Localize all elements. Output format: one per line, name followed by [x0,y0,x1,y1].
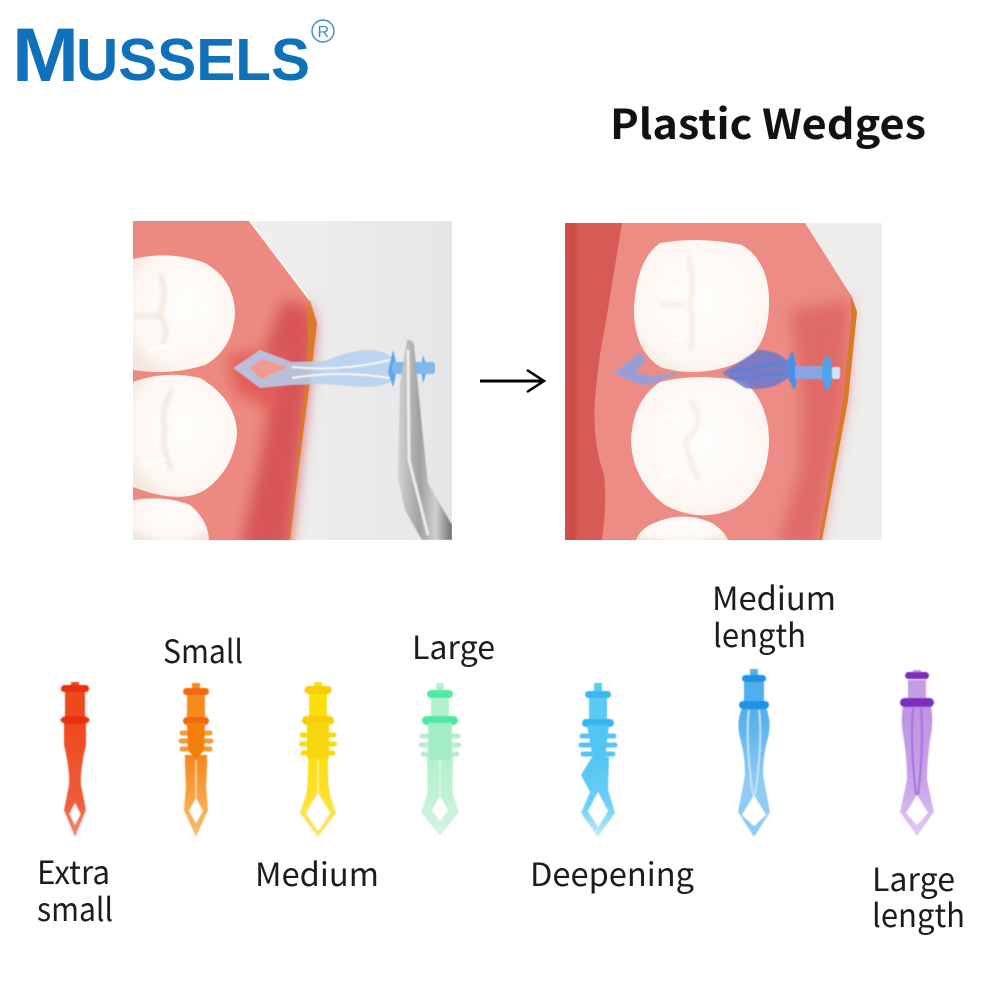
hole [70,803,80,825]
ribs [421,736,459,754]
arrow [480,370,544,392]
ribs [181,733,211,749]
photo background [252,221,452,540]
label: medium length [712,574,836,657]
photo: wedge held with tweezers before insertion [133,221,452,550]
ribs [581,736,615,754]
photo background [805,223,882,540]
tooth highlights [145,344,170,466]
center slit [195,760,197,798]
label: extra small: small [37,885,113,931]
flanges [422,690,458,725]
wedge: extra small, red [60,682,90,837]
lower tooth [636,517,728,540]
body [900,706,934,836]
body [300,725,336,837]
label: large: Large [412,623,495,669]
flanges [582,691,614,727]
tweezers [398,340,452,540]
logo: Mussels [12,13,334,98]
core [307,722,329,758]
wedge end [832,367,840,379]
core [429,723,451,760]
label: large length: length [872,891,965,937]
body [581,757,615,837]
hole [742,795,766,826]
logo initial: M [12,13,79,98]
ribs [302,735,334,753]
label: medium length: length [713,611,806,657]
flanges [900,672,934,707]
wedge highlight [730,362,786,378]
label: extra small: Extra [37,848,110,894]
orange gum edge [288,301,317,540]
stem [65,682,85,720]
wedge: large, green [421,683,459,836]
flanges [739,675,769,709]
body [421,725,459,836]
tooth fissures [133,275,172,470]
wedge: deepening, cyan [581,683,615,837]
body [184,755,208,837]
stem [744,669,764,705]
dark gum band [240,300,315,550]
middle tooth [631,377,769,515]
hole [189,798,203,823]
upper tooth [634,240,769,372]
wedge stem [392,362,435,374]
wedge: small, orange [181,683,211,837]
label: medium length: Medium [712,574,836,620]
label: large length [872,855,965,937]
wedge flange [787,350,797,390]
inner lines [912,708,922,795]
wedge left tip [613,352,680,385]
orange gum edge [819,296,857,540]
label: extra small [37,848,113,931]
tooth highlights [662,336,688,478]
gum shadow around teeth [228,350,290,410]
hole [588,792,608,827]
core [187,723,205,760]
dark inner mouth [565,223,622,540]
white edge above gum [250,221,310,300]
flanges [60,685,90,724]
title: Plastic Wedges [610,91,926,151]
logo remainder: USSELS [76,27,310,93]
wedge stem [795,366,827,379]
center slit [317,760,319,793]
outer flange [822,356,832,390]
wedge hole [250,359,288,379]
flanges [302,686,334,725]
tooth fissures [660,255,700,480]
dark gum right [778,300,850,545]
wedge right body [722,350,788,389]
stem [309,682,327,720]
label: large length: Large [872,855,955,901]
wedge: medium length, blue [738,669,770,837]
label: medium: Medium [255,850,379,896]
body [738,708,770,837]
upper tooth [133,255,235,372]
inserted wedge [233,350,435,388]
wedge flanges [388,350,426,387]
stem [589,683,607,722]
wedge between teeth [613,350,840,390]
ribs highlight [748,710,760,795]
hole [306,793,330,831]
registered mark [312,20,334,42]
gum [133,221,317,540]
stem [908,670,926,702]
hole [432,796,448,821]
flanges [183,688,209,725]
body [64,722,86,837]
registered mark: R [318,24,329,41]
stem [187,683,205,720]
wedge body [233,350,392,388]
label: deepening: Deepening [530,850,694,896]
core [587,725,609,759]
label: small: Small [163,627,243,673]
hole [906,795,928,825]
tweezer highlight [408,350,428,535]
photo: wedge inserted between teeth [565,223,882,545]
center slit [439,760,441,796]
gum [594,223,857,540]
lower tooth [133,498,209,540]
wedge: medium, yellow [300,682,336,837]
wedge highlight [292,360,390,378]
stem [431,683,449,720]
middle tooth [133,375,237,497]
wedge: large length, purple [900,670,934,836]
